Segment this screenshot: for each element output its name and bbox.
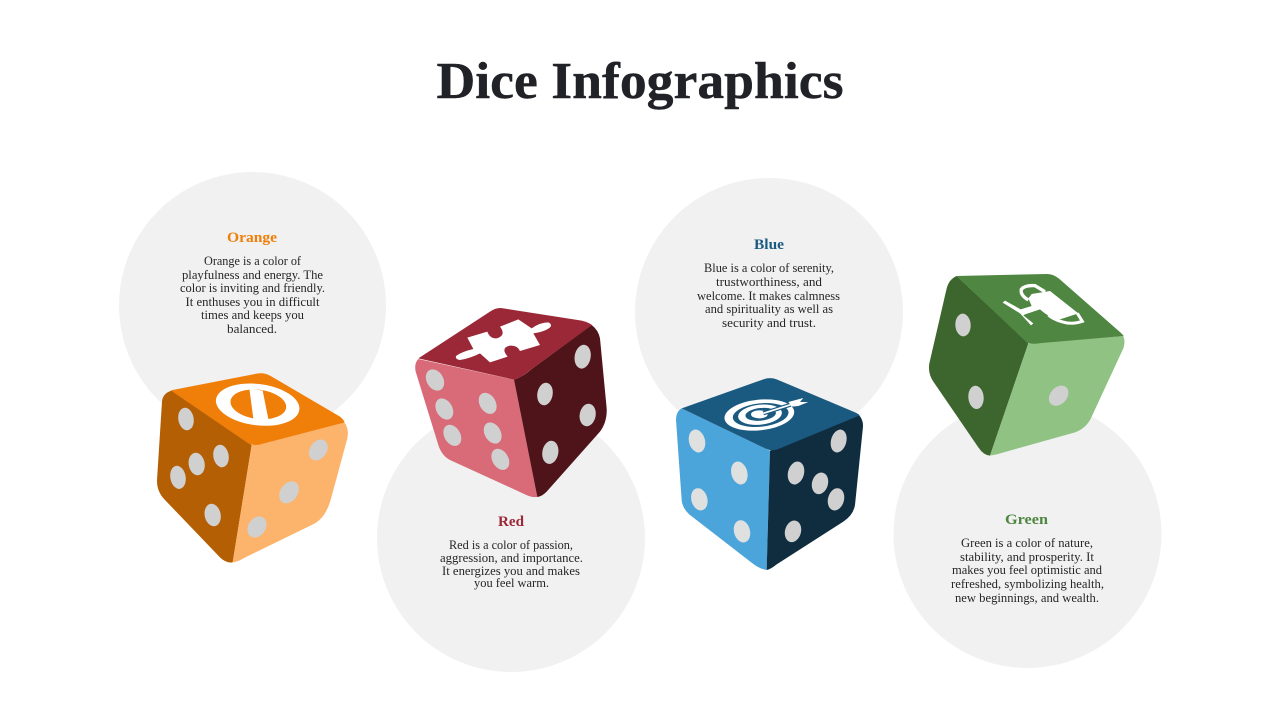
green circle	[894, 400, 1162, 668]
text block: red: you feel warm.	[474, 576, 549, 590]
red die	[415, 308, 607, 497]
text block: blue: welcome. It makes calmness	[697, 289, 840, 303]
title: Dice Infographics	[436, 53, 844, 110]
blue die	[676, 378, 863, 570]
red circle	[377, 404, 645, 672]
orange die	[157, 373, 348, 562]
text block: orange: Orange is a color of	[204, 254, 302, 268]
text block: blue: and spirituality as well as	[705, 302, 833, 316]
green die	[929, 274, 1124, 456]
text block: red: Red is a color of passion,	[449, 538, 573, 552]
text block: green	[951, 536, 1104, 605]
text block: orange: It enthuses you in difficult	[186, 295, 320, 309]
heading: blue: Blue	[754, 237, 784, 253]
icon: puzzle piece	[456, 319, 551, 362]
text block: green: Green is a color of nature,	[961, 536, 1093, 550]
text block: orange: playfulness and energy. The	[182, 268, 323, 282]
text block: orange	[180, 254, 325, 336]
blue circle	[635, 178, 903, 446]
text block: green: refreshed, symbolizing health,	[951, 577, 1104, 591]
heading: orange: Orange	[227, 230, 277, 246]
icon: target with arrow	[723, 396, 808, 434]
text block: orange: color is inviting and friendly.	[180, 281, 325, 295]
text block: green: stability, and prosperity. It	[960, 550, 1095, 564]
heading: green: Green	[1005, 512, 1049, 528]
text block: red: It energizes you and makes	[442, 564, 580, 578]
orange circle	[119, 172, 386, 439]
text block: red: aggression, and importance.	[440, 551, 583, 565]
heading: red: Red	[498, 514, 525, 530]
panel: green	[894, 400, 1162, 668]
text block: orange: times and keeps you	[201, 308, 304, 322]
panel: red	[377, 404, 645, 672]
text block: blue	[697, 261, 840, 330]
text block: orange: balanced.	[227, 322, 277, 336]
text block: red	[440, 538, 583, 590]
text block: blue: Blue is a color of serenity,	[704, 261, 834, 275]
icon: no symbol	[213, 379, 302, 430]
text block: blue: security and trust.	[722, 316, 816, 330]
panel: blue	[635, 178, 903, 446]
icon: trophy	[1003, 286, 1082, 325]
panel: orange	[119, 172, 386, 439]
text block: green: makes you feel optimistic and	[952, 563, 1102, 577]
text block: green: new beginnings, and wealth.	[955, 591, 1099, 605]
text block: blue: trustworthiness, and	[716, 275, 822, 289]
